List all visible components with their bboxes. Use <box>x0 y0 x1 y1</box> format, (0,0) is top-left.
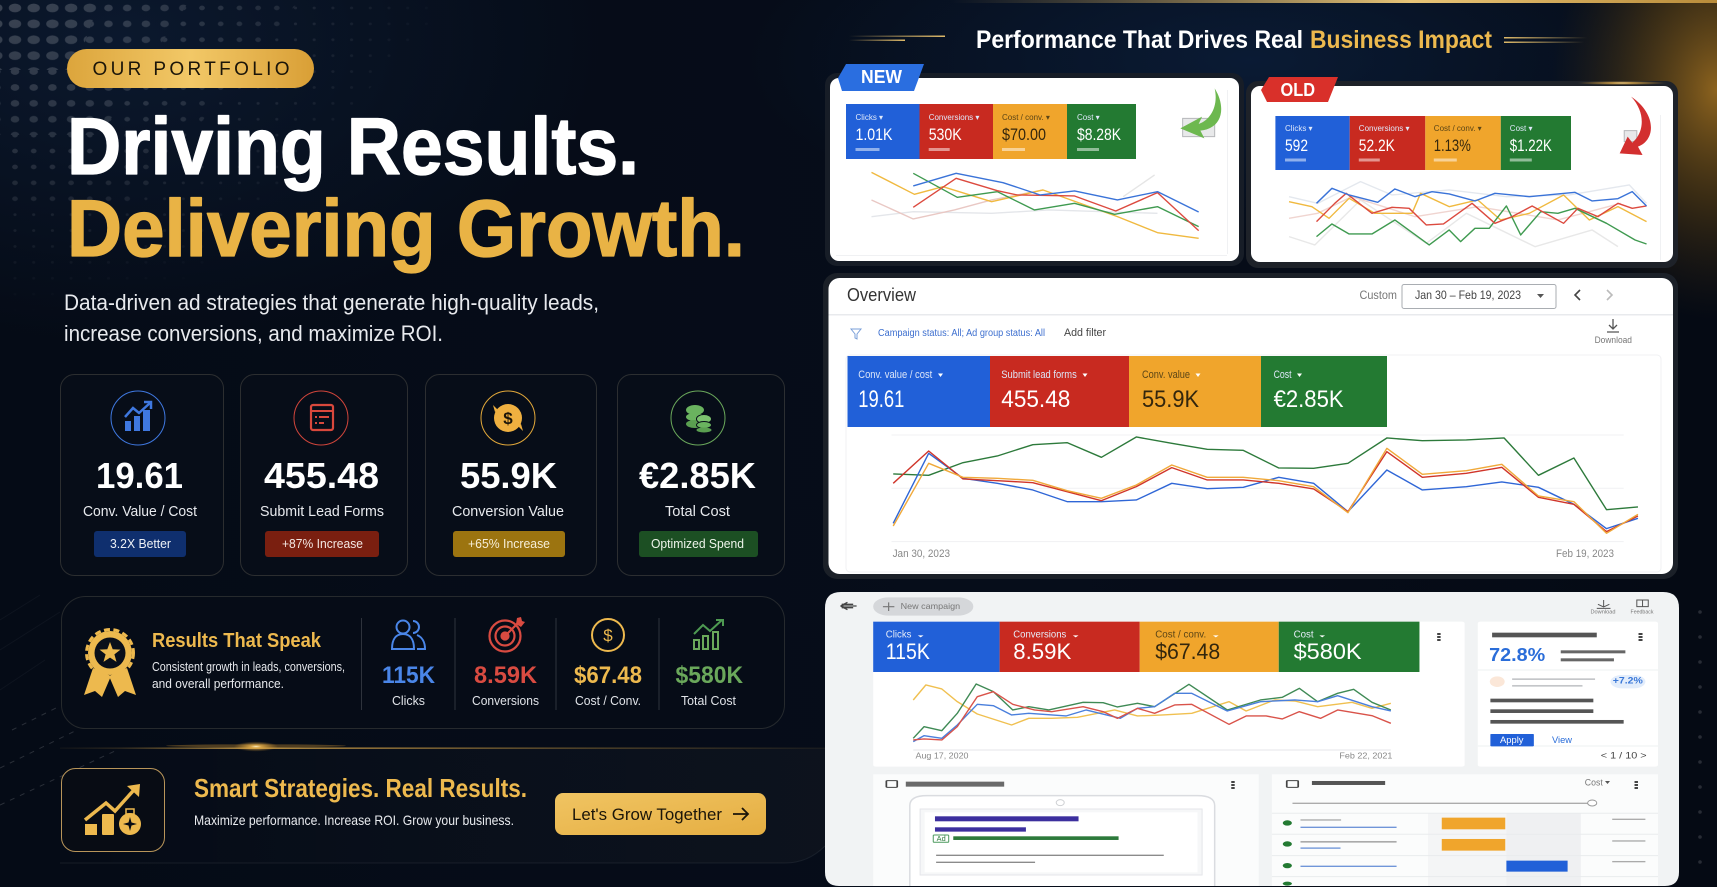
panel: new dashboard <box>825 64 1244 266</box>
dashboard labels: +7.2% <box>1613 676 1643 687</box>
metric: conversions: 8.59K <box>474 662 538 689</box>
panel: overview dashboard <box>823 273 1678 579</box>
overview header: Custom <box>1360 288 1397 302</box>
panel: stat card lead forms <box>240 374 408 576</box>
metric: conversions <box>472 617 539 708</box>
metric tiles: old: 1.13% <box>1434 136 1471 155</box>
icon: coins <box>671 391 725 445</box>
metric tiles: overview <box>848 356 1387 427</box>
tag: new: NEW <box>861 67 902 87</box>
metric tiles: overview: 19.61 <box>858 386 904 413</box>
metric tiles: new <box>846 104 1136 159</box>
overview header: Jan 30 – Feb 19, 2023 <box>1415 288 1521 302</box>
title: Delivering Growth. <box>67 184 745 274</box>
filter row: Campaign status: All; Ad group status: All <box>878 328 1045 339</box>
dashboard labels: New campaign <box>901 601 960 611</box>
panel: stat card conv value <box>60 374 224 576</box>
metric: cost per conversion <box>574 619 642 708</box>
panel: stat card total cost <box>618 374 784 576</box>
panel: old dashboard <box>1246 77 1678 268</box>
panel: stat card lead forms: Submit Lead Forms <box>260 503 384 520</box>
line chart: old <box>1289 97 1651 247</box>
heading: performance: Business Impact <box>1310 26 1493 54</box>
dashboard labels: 115K <box>886 639 930 664</box>
metric tiles: old: Cost ▾ <box>1510 124 1532 133</box>
panel: overview dashboard: Feb 19, 2023 <box>1556 548 1614 560</box>
panel: stat card conv value: 3.2X Better <box>110 536 172 551</box>
filter row: Add filter <box>1064 327 1106 339</box>
metric tiles: old: $1.22K <box>1510 136 1552 155</box>
dashboard labels: View <box>1552 735 1573 745</box>
icon: people <box>392 620 425 649</box>
button: let's grow together <box>555 793 766 835</box>
overview header <box>828 284 1673 316</box>
metric tiles: overview: €2.85K <box>1274 386 1344 413</box>
icon: dollar coin: $ <box>503 409 513 428</box>
dashboard labels: Apply <box>1500 735 1524 745</box>
metric tiles: overview: 455.48 <box>1001 386 1070 413</box>
dashboard labels: $580K <box>1294 639 1362 664</box>
metric tiles: overview: Cost <box>1274 369 1292 381</box>
metric tiles: overview: Conv. value <box>1142 369 1190 381</box>
panel: campaign dashboard <box>825 592 1679 886</box>
dashboard labels: Cost <box>1294 630 1314 641</box>
panel: stat card lead forms: 455.48 <box>264 455 379 496</box>
subtitle: increase conversions, and maximize ROI. <box>64 321 443 346</box>
dashboard labels: Cost / conv. <box>1155 630 1206 641</box>
metric: cost per conversion: $67.48 <box>574 662 642 689</box>
panel: results that speak: Results That Speak <box>152 630 322 652</box>
dashboard labels: 72.8% <box>1489 645 1545 665</box>
icon: green growth chart <box>694 620 723 649</box>
dashboard labels: Clicks <box>886 630 912 641</box>
icon: strategy chart <box>62 768 164 852</box>
metric: total cost: $580K <box>676 662 744 689</box>
dashboard labels: Feedback <box>1630 610 1654 616</box>
filter row: Download <box>1595 335 1632 345</box>
metric tiles: new: 530K <box>929 125 962 144</box>
metric tiles: old: Cost / conv. ▾ <box>1434 124 1482 133</box>
metric tiles: new: Conversions ▾ <box>929 113 979 122</box>
dashboard labels: Cost <box>1585 778 1603 788</box>
metric tiles: new: Cost / conv. ▾ <box>1002 113 1050 122</box>
title: Driving Results. <box>67 102 639 192</box>
overview header: Overview <box>847 285 917 305</box>
panel: stat card lead forms: +87% Increase <box>282 536 363 551</box>
metric tiles: old: Clicks ▾ <box>1285 124 1313 133</box>
panel: stat card conversion value: +65% Increase <box>468 536 550 551</box>
metric tiles: new: $70.00 <box>1002 125 1046 144</box>
dashboard shapes <box>841 597 1658 886</box>
metric tiles: new: Clicks ▾ <box>856 113 883 122</box>
panel: stat card total cost: Total Cost <box>665 503 731 520</box>
heading: performance <box>849 26 1587 54</box>
panel: overview dashboard: Jan 30, 2023 <box>893 548 950 560</box>
metric: total cost: Total Cost <box>681 693 736 708</box>
metric: cost per conversion: Cost / Conv. <box>575 693 641 708</box>
metric tiles: new: Cost ▾ <box>1077 113 1100 122</box>
dashboard labels: Aug 17, 2020 <box>916 751 969 760</box>
icon: green arrow <box>1180 88 1221 138</box>
icon: target <box>490 617 525 652</box>
subtitle: Data-driven ad strategies that generate high-quality leads, <box>64 290 599 315</box>
subtitle <box>64 290 599 346</box>
dashboard labels <box>886 601 1654 843</box>
metric: clicks: 115K <box>382 662 436 689</box>
panel: stat card total cost: €2.85K <box>639 455 756 496</box>
panel: stat card conversion value <box>426 374 596 576</box>
icon: form <box>294 391 348 445</box>
metric: clicks <box>382 620 436 708</box>
metric: total cost <box>676 620 744 708</box>
panel: results that speak: and overall performance. <box>152 677 284 691</box>
metric tiles: old <box>1275 116 1571 170</box>
icon: red arrow <box>1620 97 1651 155</box>
panel: stat card total cost: Optimized Spend <box>651 536 744 551</box>
badge: our portfolio: OUR PORTFOLIO <box>92 59 290 80</box>
panel: stat card conv value: 19.61 <box>96 455 183 496</box>
button: let's grow together: Let's Grow Together <box>572 805 722 824</box>
tag: old <box>1261 77 1338 102</box>
metric tiles: overview: Submit lead forms <box>1001 369 1077 381</box>
metric tiles: new: 1.01K <box>856 125 893 144</box>
metric: clicks: Clicks <box>392 693 425 708</box>
metric tiles: overview: 55.9K <box>1142 386 1199 413</box>
metric tiles: old: 592 <box>1285 136 1308 155</box>
dashboard labels: Feb 22, 2021 <box>1339 751 1393 760</box>
metric tiles: overview: Conv. value / cost <box>858 369 932 381</box>
metric: conversions: Conversions <box>472 693 539 708</box>
dashboard labels: < 1 / 10 > <box>1601 750 1647 760</box>
panel: stat card conv value: Conv. Value / Cost <box>83 503 198 520</box>
dashboard labels: $67.48 <box>1155 639 1220 664</box>
panel: results that speak <box>62 596 784 728</box>
badge: our portfolio <box>67 49 314 88</box>
dashboard labels: Download <box>1590 610 1616 616</box>
title <box>67 102 745 274</box>
dashboard labels: 8.59K <box>1013 639 1072 664</box>
line chart: overview <box>892 435 1638 542</box>
icon: dollar circle: $ <box>603 626 613 645</box>
icon: dollar coin <box>481 391 535 445</box>
metric tiles: old: 52.2K <box>1359 136 1395 155</box>
panel: stat card conversion value: Conversion Value <box>452 503 564 520</box>
metric tiles: old: Conversions ▾ <box>1359 124 1410 133</box>
filter row <box>851 319 1632 345</box>
metric tiles: new: $8.28K <box>1077 125 1122 144</box>
heading: performance: Performance That Drives Real <box>976 26 1303 54</box>
tag: old: OLD <box>1280 80 1315 100</box>
line chart: new <box>871 88 1221 238</box>
dashboard labels: Conversions <box>1013 630 1066 641</box>
panel: call to action <box>58 742 830 863</box>
panel: call to action: Maximize performance. Increase ROI. Grow your business. <box>194 812 514 828</box>
tag: new <box>838 64 924 91</box>
panel: results that speak: Consistent growth in leads, conversions, <box>152 660 345 674</box>
icon: award medal <box>84 630 136 697</box>
dashboard labels: Ad <box>937 836 946 843</box>
icon: growth chart <box>111 391 165 445</box>
panel: call to action: Smart Strategies. Real Results. <box>194 773 527 803</box>
panel: stat card conversion value: 55.9K <box>460 455 557 496</box>
